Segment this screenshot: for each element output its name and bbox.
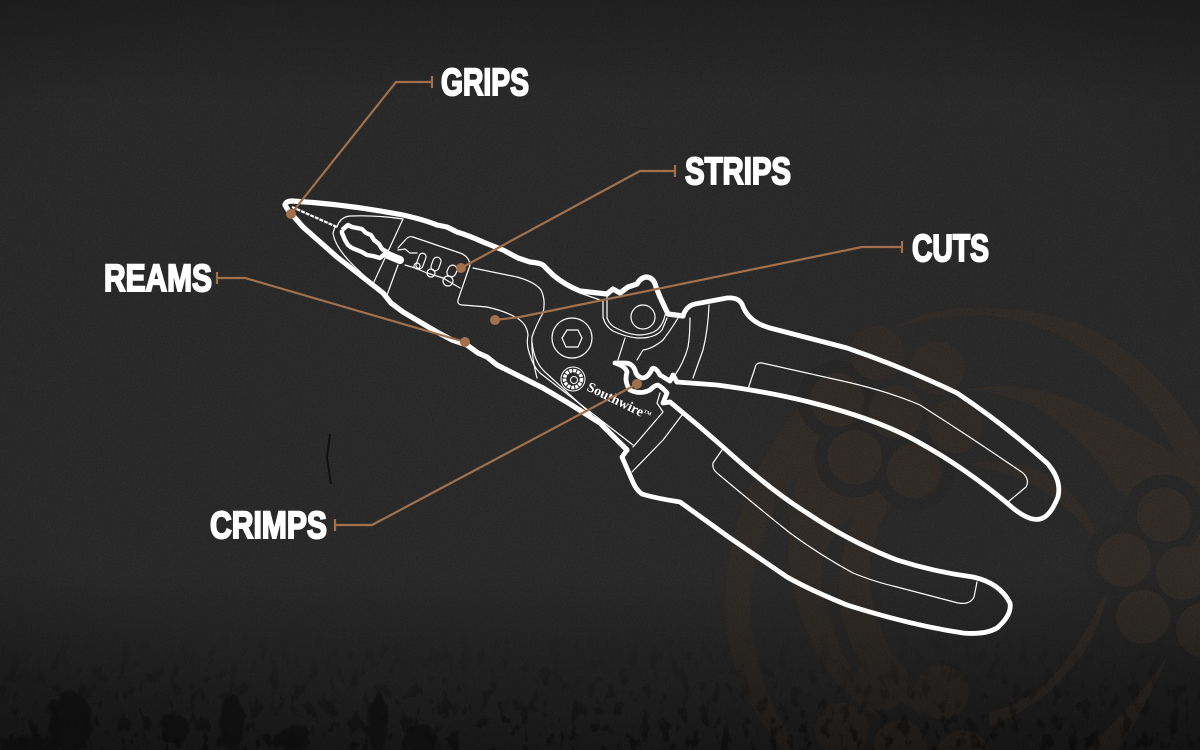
callout: REAMS	[104, 258, 470, 347]
callout: CUTS	[490, 228, 989, 325]
anchor dot: GRIPS	[286, 209, 296, 219]
wire stripper holes	[398, 249, 460, 288]
label: CRIMPS: CRIMPS	[210, 505, 327, 547]
pivot screw	[552, 318, 592, 358]
handle collar lines	[632, 305, 709, 472]
jaw tip serration	[292, 207, 337, 227]
upper handle grip line	[748, 363, 1027, 502]
label: STRIPS: STRIPS	[685, 151, 791, 193]
anchor dot: STRIPS	[456, 263, 466, 273]
brand name: TM	[642, 410, 652, 418]
lower jaw outline	[285, 205, 627, 450]
leader line: CUTS	[495, 241, 902, 320]
stripper and cutter chamber lines	[398, 237, 633, 445]
pivot inner lines	[580, 293, 667, 338]
anchor dot: CRIMPS	[632, 379, 642, 389]
brand name: Southwire	[584, 380, 646, 420]
pivot rivet	[631, 305, 655, 329]
label: REAMS: REAMS	[104, 258, 212, 300]
callout: STRIPS	[456, 151, 791, 273]
serrated oval gripper	[342, 225, 387, 258]
pliers illustration	[285, 201, 1059, 633]
leader line: STRIPS	[461, 165, 675, 268]
background emblem: brown swirl and dots	[725, 308, 1200, 750]
jaw cavity lines	[333, 216, 403, 295]
callout: GRIPS	[286, 62, 529, 219]
upper jaw outline	[285, 201, 683, 316]
wavy pivot gap outline	[615, 363, 677, 403]
leader line: GRIPS	[291, 76, 432, 214]
label: GRIPS: GRIPS	[441, 62, 529, 104]
crimp bar	[388, 255, 400, 260]
label: CUTS: CUTS	[912, 228, 989, 270]
brand logo mark	[561, 367, 585, 391]
leader line: CRIMPS	[335, 384, 637, 531]
lower handle grip line	[713, 450, 977, 603]
callout: CRIMPS	[210, 379, 642, 547]
upper handle outline	[677, 298, 1059, 519]
lower handle outline	[622, 402, 1010, 633]
leader line: REAMS	[217, 272, 465, 342]
anchor dot: REAMS	[460, 337, 470, 347]
anchor dot: CUTS	[490, 315, 500, 325]
